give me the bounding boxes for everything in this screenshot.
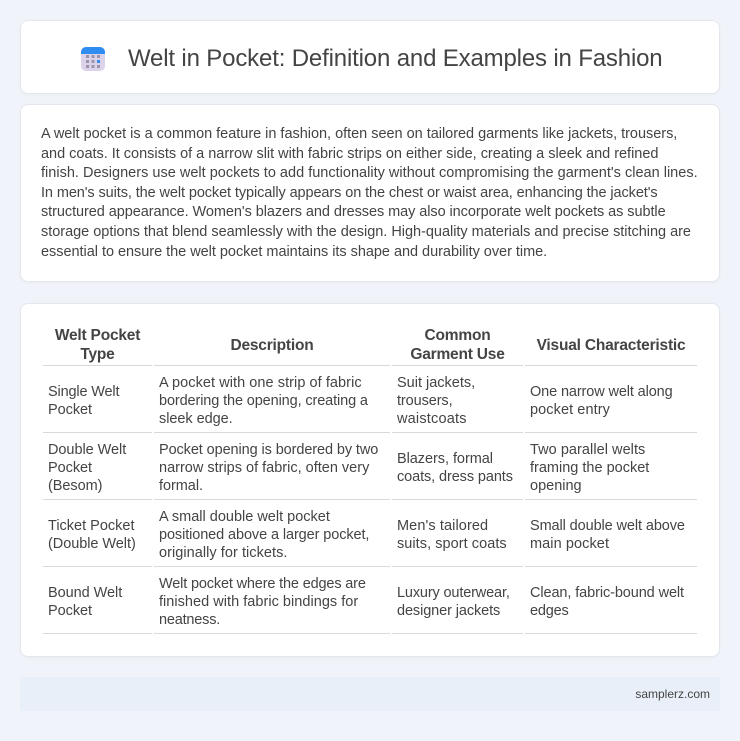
table row: double welt pocket: Pocket	[48, 460, 92, 476]
panel: table card	[20, 303, 720, 657]
panel: title card	[20, 20, 720, 94]
text block: intro paragraph	[41, 126, 698, 260]
table row: single welt pocket: waistcoats	[397, 411, 467, 427]
text block: intro paragraph: essential to ensure the welt pocket maintains its shape and durability over time.	[41, 244, 547, 260]
table row: bound welt pocket: neatness.	[159, 612, 220, 628]
table row: ticket pocket: Small double welt above	[530, 518, 685, 534]
table row: ticket pocket	[43, 509, 697, 567]
table row: bound welt pocket: designer jackets	[397, 603, 500, 619]
text block: intro paragraph: In men's suits, the welt pocket typically appears on the chest or waist area, enhancing the jacket's	[41, 185, 658, 201]
table row: bound welt pocket: Bound Welt	[48, 585, 122, 601]
footer bar	[20, 677, 720, 711]
table row: bound welt pocket: finished with fabric bindings for	[159, 594, 358, 610]
table row: ticket pocket: originally for tickets.	[159, 545, 287, 561]
table row: ticket pocket: (Double Welt)	[48, 536, 136, 552]
table row: single welt pocket: Single Welt	[48, 384, 119, 400]
table row: double welt pocket: opening	[530, 478, 582, 494]
table row: ticket pocket: suits, sport coats	[397, 536, 507, 552]
text block: intro paragraph: and coats. It consists of a narrow slit with fabric strips on either side, creating a sleek and refined	[41, 146, 658, 162]
table row: single welt pocket: Pocket	[48, 402, 92, 418]
table row: single welt pocket: One narrow welt along	[530, 384, 673, 400]
table header row: Common	[425, 327, 490, 344]
table row: ticket pocket: main pocket	[530, 536, 609, 552]
table row: bound welt pocket	[43, 576, 697, 634]
table row: single welt pocket	[43, 375, 697, 433]
table row: ticket pocket: positioned above a larger pocket,	[159, 527, 369, 543]
table row: double welt pocket: Two parallel welts	[530, 442, 645, 458]
footer text: source: samplerz.com	[635, 687, 710, 701]
table row: double welt pocket: Blazers, formal	[397, 451, 493, 467]
table header row: Garment Use	[410, 346, 505, 363]
table row: double welt pocket	[43, 442, 697, 500]
text block: intro paragraph: structured appearance. Women's blazers and dresses may also incorporate welt pockets as subtle	[41, 204, 666, 220]
table header row	[43, 327, 697, 366]
table row: single welt pocket: sleek edge.	[159, 411, 233, 427]
table row: single welt pocket: Suit jackets,	[397, 375, 475, 391]
text block: intro paragraph: A welt pocket is a common feature in fashion, often seen on tailored garments like jackets, trousers,	[41, 126, 677, 142]
text block: intro paragraph: finish. Designers use welt pockets to add functionality without compromising the garment's clean lines.	[41, 165, 698, 181]
table row: ticket pocket: Men's tailored	[397, 518, 488, 534]
table header row: Description	[230, 337, 314, 354]
table header row: Type	[80, 346, 115, 363]
table row: bound welt pocket: Pocket	[48, 603, 92, 619]
table row: single welt pocket: pocket entry	[530, 402, 610, 418]
title: Welt in Pocket: Definition and Examples in Fashion	[128, 45, 662, 72]
table header row: Visual Characteristic	[537, 337, 685, 354]
table row: double welt pocket: narrow strips of fabric, often very	[159, 460, 369, 476]
text block: intro paragraph: storage options that blend seamlessly with the design. High-quality materials and precise stitching are	[41, 224, 691, 240]
table row: bound welt pocket: edges	[530, 603, 569, 619]
table row: double welt pocket: Pocket opening is bordered by two	[159, 442, 378, 458]
table row: double welt pocket: Double Welt	[48, 442, 126, 458]
table row: double welt pocket: framing the pocket	[530, 460, 649, 476]
table row: bound welt pocket: Welt pocket where the edges are	[159, 576, 366, 592]
panel: intro text card	[20, 104, 720, 282]
table row: ticket pocket: A small double welt pocket	[159, 509, 330, 525]
table row: double welt pocket: formal.	[159, 478, 203, 494]
table row: single welt pocket: bordering the opening, creating a	[159, 393, 368, 409]
table row: double welt pocket: coats, dress pants	[397, 469, 513, 485]
table row: double welt pocket: (Besom)	[48, 478, 102, 494]
table row: ticket pocket: Ticket Pocket	[48, 518, 134, 534]
table header row: Welt Pocket	[55, 327, 140, 344]
table row: bound welt pocket: Luxury outerwear,	[397, 585, 510, 601]
table row: single welt pocket: trousers,	[397, 393, 453, 409]
icon: calendar	[81, 47, 105, 71]
table row: single welt pocket: A pocket with one strip of fabric	[159, 375, 362, 391]
table row: bound welt pocket: Clean, fabric-bound welt	[530, 585, 684, 601]
